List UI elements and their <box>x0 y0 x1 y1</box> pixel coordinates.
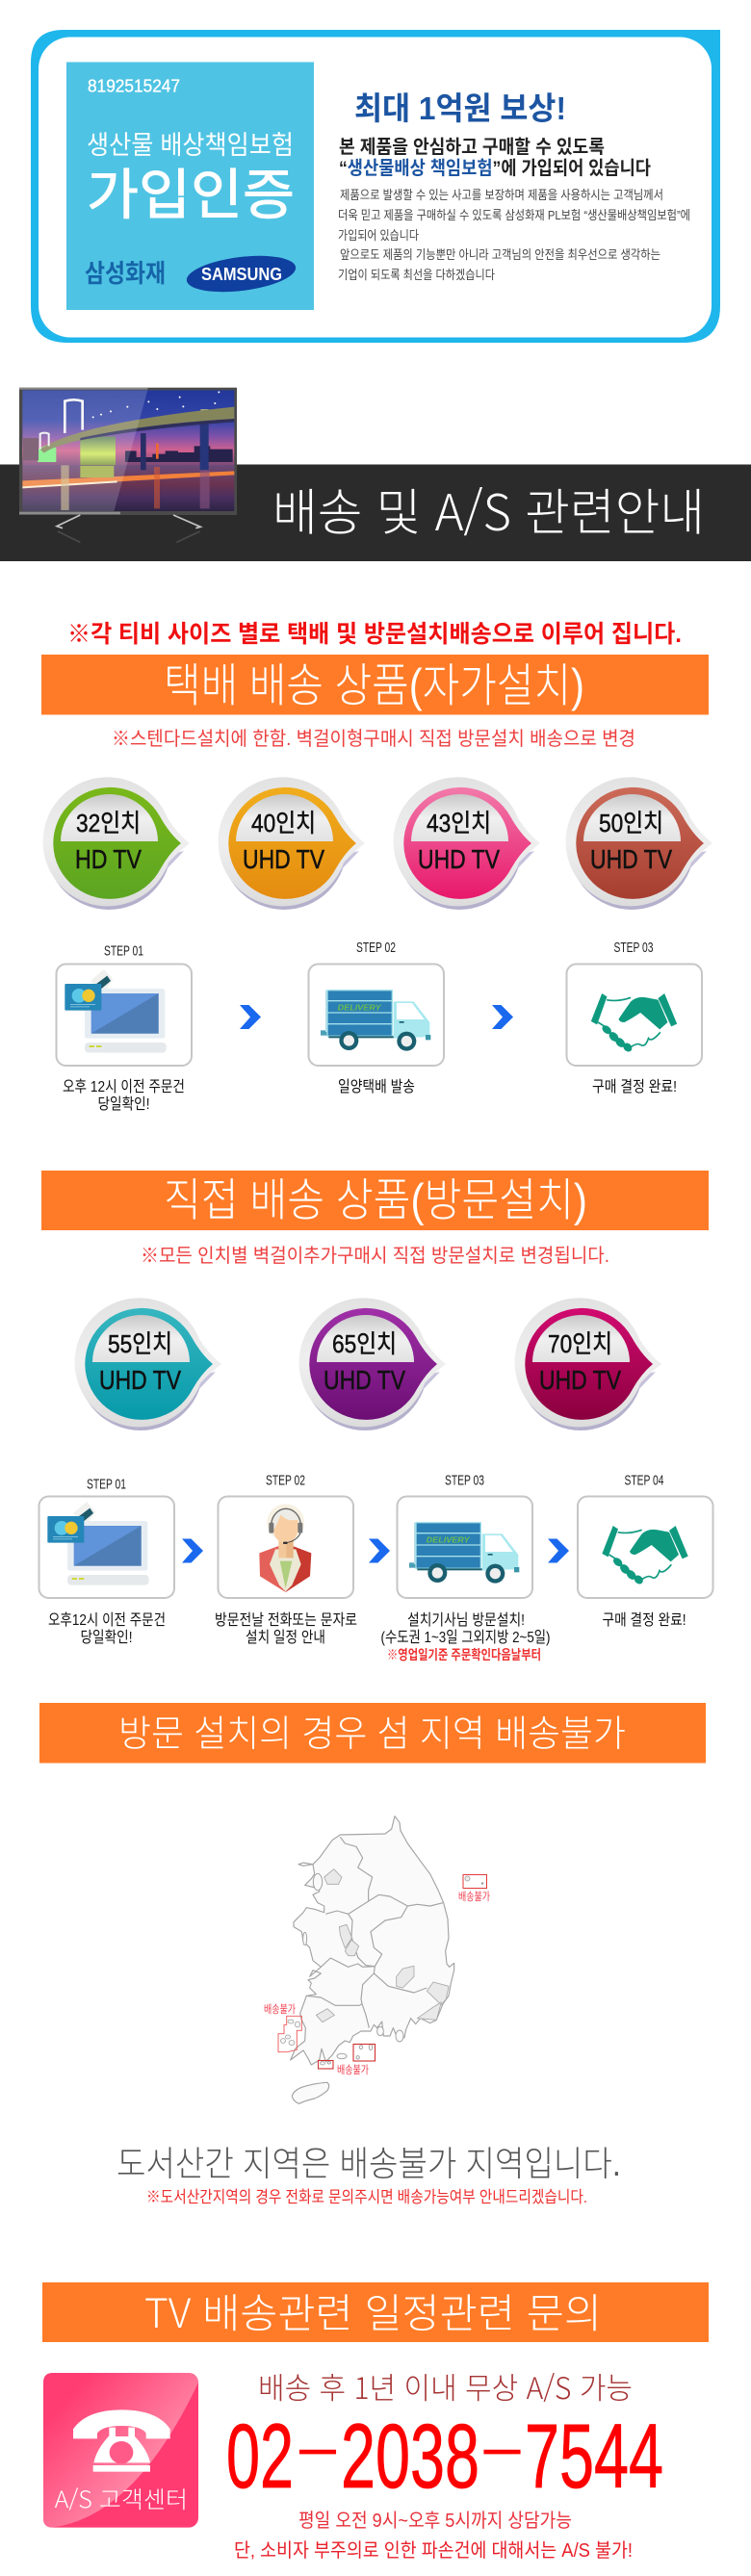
phone number: - <box>478 2415 528 2480</box>
statement: island areas: 도서산간 지역은 배송불가 지역입니다. <box>117 2144 621 2183</box>
badge: 70 inch <box>515 1298 661 1430</box>
badge: 43 inch <box>394 777 540 910</box>
step 3: 구매 결정 완료! <box>592 1078 677 1095</box>
small islands <box>303 1873 403 2065</box>
icon: call agent <box>259 1504 311 1592</box>
certificate subtitle: 생산물 배상책임보험 <box>87 131 294 160</box>
step 3: 설치기사님 방문설치! <box>407 1611 525 1629</box>
marker: ulleung: 배송불가 <box>458 1891 490 1903</box>
badge: 65 inch: 65인치 <box>332 1329 397 1358</box>
badge: 50 inch: UHD TV <box>590 844 672 874</box>
certificate number: 8192515247 <box>88 77 180 96</box>
step 4: 구매 결정 완료! <box>603 1611 686 1629</box>
banner: direct delivery <box>41 1171 709 1230</box>
description text: 더욱 믿고 제품을 구매하실 수 있도록 삼성화재 PL보험 “생산물배상책임보험”에 <box>338 208 690 222</box>
marker: south coast islands <box>318 2045 376 2076</box>
step 2: 방문전날 전화또는 문자로 <box>215 1611 357 1629</box>
map markers: delivery unavailable <box>264 1875 490 2076</box>
step 2: STEP 02 <box>266 1473 305 1488</box>
arrow <box>182 1538 203 1563</box>
step flow: parcel delivery <box>56 940 702 1113</box>
free A/S heading: 배송 후 1년 이내 무상 A/S 가능 <box>258 2364 633 2408</box>
icon: A/S customer center: A/S 고객센터 <box>55 2481 188 2514</box>
badge: 55 inch <box>75 1298 221 1430</box>
arrow <box>369 1538 390 1563</box>
badge: 70 inch: UHD TV <box>539 1365 621 1395</box>
step 3: (수도권 1~3일 그외지방 2~5일) <box>381 1629 551 1646</box>
step 1: 오후 12시 이전 주문건 <box>63 1078 185 1095</box>
section title: 배송 및 A/S 관련안내 <box>272 473 705 545</box>
arrow <box>240 1005 261 1029</box>
step flow: direct delivery <box>39 1473 712 1662</box>
note: wall mount change: ※모든 인치별 벽걸이추가구매시 직접 방문설치로 변경됩니다. <box>141 1245 609 1267</box>
badge: 32 inch: 32인치 <box>76 809 141 837</box>
tv illustration <box>19 388 237 542</box>
step 3: STEP 03 <box>614 940 653 956</box>
certificate card <box>66 62 314 310</box>
telephone <box>73 2409 170 2472</box>
damage exclusion: 단, 소비자 부주의로 인한 파손건에 대해서는 A/S 불가! <box>234 2539 633 2562</box>
phone number: 2038 <box>341 2406 479 2508</box>
badge: 40 inch <box>219 777 365 910</box>
step 3: ※영업일기준 주문확인다음날부터 <box>387 1647 541 1662</box>
panel frame <box>31 30 720 343</box>
step 1 <box>39 1477 174 1646</box>
step 4: STEP 04 <box>624 1473 664 1488</box>
banner: schedule enquiry <box>42 2281 709 2342</box>
step 4 <box>578 1473 712 1629</box>
insurer name: 삼성화재 <box>85 259 166 288</box>
description text <box>338 188 690 282</box>
step 1 <box>56 943 192 1113</box>
step 1: 당일확인! <box>98 1095 150 1113</box>
step 1: 당일확인! <box>81 1629 133 1646</box>
certificate title: 가입인증 <box>87 165 295 226</box>
badge: 50 inch <box>566 777 712 910</box>
banner: parcel delivery <box>41 655 709 714</box>
marker: ulleung <box>458 1875 490 1903</box>
marker: south coast islands: 배송불가 <box>337 2064 369 2076</box>
badge: 32 inch: HD TV <box>75 844 142 874</box>
note: standard installation: ※스텐다드설치에 한함. 벽걸이형구매시 직접 방문설치 배송으로 변경 <box>112 728 635 750</box>
description text: 제품으로 발생할 수 있는 사고를 보장하며 제품을 사용하시는 고객님께서 <box>340 188 663 202</box>
step 3: STEP 03 <box>445 1473 484 1488</box>
consultation hours: 평일 오전 9시~오후 5시까지 상담가능 <box>298 2510 572 2532</box>
badge: 70 inch: 70인치 <box>548 1329 612 1358</box>
badge: 43 inch: UHD TV <box>418 844 500 874</box>
compensation heading: 최대 1억원 보상! <box>354 90 566 126</box>
step 3 <box>381 1473 551 1662</box>
step 3 <box>566 940 702 1095</box>
samsung logo: SAMSUNG <box>201 265 282 284</box>
badge: 40 inch: UHD TV <box>243 844 324 874</box>
step 2: 설치 일정 안내 <box>246 1629 325 1646</box>
map: south korea <box>291 1816 454 2103</box>
icon: A/S customer center <box>43 2373 198 2528</box>
badge: 43 inch: 43인치 <box>427 809 491 837</box>
banner: schedule enquiry: TV 배송관련 일정관련 문의 <box>144 2281 602 2340</box>
reassurance line 1: 본 제품을 안심하고 구매할 수 있도록 <box>339 137 605 158</box>
panel: insurance certification <box>31 30 720 343</box>
phone number: - <box>293 2415 343 2480</box>
phone number: 02 <box>226 2406 294 2508</box>
step 1: STEP 01 <box>104 943 143 959</box>
banner: island delivery unavailable <box>39 1703 706 1764</box>
description text: 기업이 되도록 최선을 다하겠습니다 <box>338 268 495 282</box>
badge: 65 inch <box>299 1298 446 1430</box>
phone number <box>226 2406 663 2508</box>
badge: 65 inch: UHD TV <box>324 1365 405 1395</box>
banner: parcel delivery: 택배 배송 상품(자가설치) <box>164 660 584 712</box>
section band: delivery and A/S <box>0 464 751 561</box>
step 2 <box>308 940 444 1095</box>
banner: direct delivery: 직접 배송 상품(방문설치) <box>164 1174 587 1225</box>
marker: southwest islands: 배송불가 <box>264 2003 296 2016</box>
description text: 앞으로도 제품의 기능뿐만 아니라 고객님의 안전을 최우선으로 생각하는 <box>340 247 660 262</box>
step 1: 오후12시 이전 주문건 <box>48 1611 166 1629</box>
step 2: 일양택배 발송 <box>338 1078 415 1095</box>
step 2: STEP 02 <box>356 940 396 956</box>
arrow <box>492 1005 513 1029</box>
marker: southwest islands <box>264 2003 301 2052</box>
reassurance line 2: “생산물배상 책임보험”에 가입되어 있습니다 <box>339 158 651 179</box>
arrow <box>548 1538 569 1563</box>
note: island enquiry: ※도서산간지역의 경우 전화로 문의주시면 배송가능여부 안내드리겠습니다. <box>146 2188 587 2206</box>
badge: 55 inch: 55인치 <box>108 1329 172 1358</box>
samsung logo <box>185 250 298 297</box>
badge: 32 inch <box>43 777 190 910</box>
badge: 50 inch: 50인치 <box>599 809 663 837</box>
badge: 55 inch: UHD TV <box>99 1365 181 1395</box>
banner: island delivery unavailable: 방문 설치의 경우 섬 지역 배송불가 <box>118 1714 626 1755</box>
badge: 40 inch: 40인치 <box>251 809 316 837</box>
step 2 <box>215 1473 357 1646</box>
description text: 가입되어 있습니다 <box>338 228 419 243</box>
island: jeju <box>292 2082 329 2103</box>
notice: delivery types by size: ※각 티비 사이즈 별로 택배 및 방문설치배송으로 이루어 집니다. <box>67 621 682 648</box>
phone number: 7544 <box>525 2406 663 2508</box>
step 1: STEP 01 <box>87 1477 126 1492</box>
